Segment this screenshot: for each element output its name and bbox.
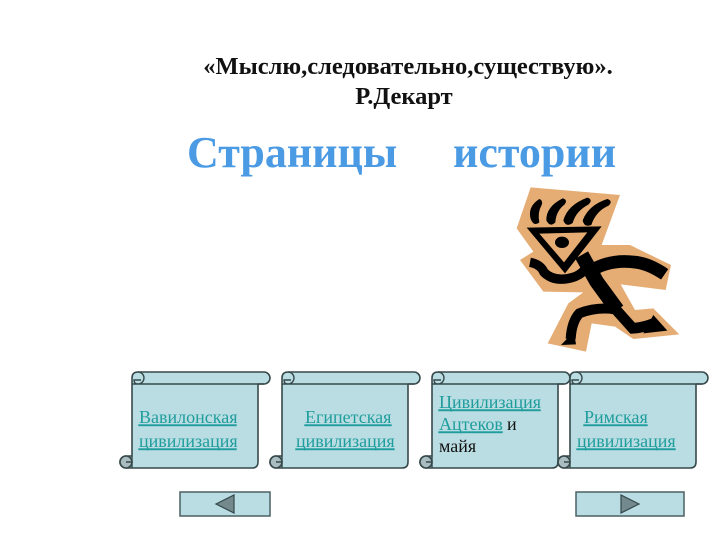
quote: Descartes <box>203 53 613 110</box>
scroll: Egyptian civilization: цивилизация <box>296 431 395 451</box>
quote: Descartes: «Мыслю,следовательно,существую». <box>203 53 613 80</box>
button: next <box>576 492 684 516</box>
title: pages of history: Страницы <box>187 128 397 177</box>
scroll: Egyptian civilization: Египетская <box>305 407 391 427</box>
quote: Descartes: Р.Декарт <box>355 83 453 110</box>
title: pages of history: истории <box>453 128 616 177</box>
scroll: Aztec and Maya civilization <box>420 372 570 468</box>
scroll: Babylonian civilization <box>120 372 270 468</box>
scroll: Aztec and Maya civilization: майя <box>439 436 476 456</box>
scroll: Aztec and Maya civilization: и <box>507 414 517 434</box>
scroll: Aztec and Maya civilization: Цивилизация <box>439 392 541 412</box>
scroll: Roman civilization: Римская <box>584 407 648 427</box>
scroll: Egyptian civilization <box>270 372 420 468</box>
scroll: Roman civilization: цивилизация <box>577 431 676 451</box>
scroll: Babylonian civilization: цивилизация <box>139 431 238 451</box>
scroll: Babylonian civilization: Вавилонская <box>139 407 237 427</box>
button: previous <box>180 492 270 516</box>
icon: running tribal figure <box>517 187 679 352</box>
title: pages of history <box>187 128 616 177</box>
scroll: Aztec and Maya civilization: Ацтеков <box>439 414 503 434</box>
scroll: Roman civilization <box>558 372 708 468</box>
